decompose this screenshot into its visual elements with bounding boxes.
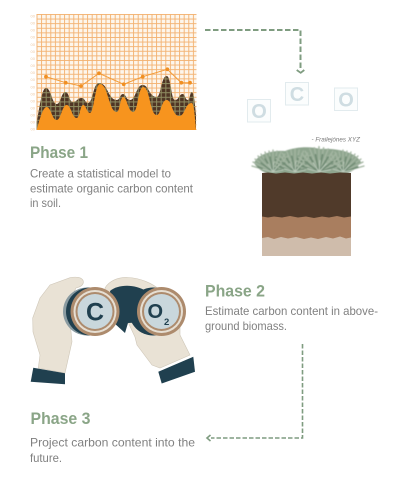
- y axis labels: 00: [30, 91, 36, 96]
- y axis labels: 00: [30, 56, 36, 61]
- icon: O letter box right: [334, 88, 358, 112]
- binocular body: [110, 286, 146, 333]
- dark area series: [37, 76, 196, 130]
- text: phase 1 description: [30, 168, 194, 210]
- label O2: O: [148, 301, 163, 323]
- icon: O letter box right: O: [338, 90, 354, 112]
- line series with markers: [44, 67, 192, 88]
- text: phase 3 description: [30, 436, 195, 465]
- text: phase 2 description: ground biomass.: [205, 320, 287, 333]
- y axis labels: 00: [30, 112, 36, 118]
- text: phase 1 description: in soil.: [30, 197, 61, 210]
- y axis labels: 00: [30, 120, 36, 124]
- chart grid: [36, 14, 196, 130]
- right cuff: [158, 357, 195, 384]
- icon: C letter box: C: [290, 84, 304, 106]
- text: phase 3 description: future.: [30, 452, 62, 465]
- text: phase 1 description: Create a statistical model to: [30, 168, 171, 180]
- soil layer: medium: [262, 213, 351, 239]
- icon: C letter box: [286, 82, 308, 106]
- soil layer: light: [262, 232, 351, 256]
- left cuff: [31, 368, 65, 384]
- y axis labels: 00: [30, 49, 36, 54]
- y axis labels: 00: [30, 42, 36, 47]
- arrow: phase 2 to phase 3: [207, 344, 302, 441]
- left hand: [33, 277, 83, 373]
- y axis labels: 00: [30, 20, 36, 26]
- label O2: [148, 301, 169, 328]
- plant tufts: [252, 147, 364, 174]
- illustration: hands holding binoculars: [31, 277, 195, 384]
- right barrel: [129, 287, 186, 336]
- y axis labels: 00: [30, 14, 36, 18]
- y axis labels: 00: [30, 106, 36, 110]
- y axis labels: [30, 14, 36, 132]
- y axis labels: 00: [30, 77, 36, 82]
- heading: phase 3: Phase 3: [30, 409, 90, 428]
- y axis labels: 00: [30, 70, 36, 75]
- label O2: 2: [164, 317, 169, 328]
- heading: phase 1: Phase 1: [30, 143, 88, 162]
- icon: O letter box left: [248, 100, 270, 123]
- text: phase 2 description: [205, 305, 378, 333]
- y axis labels: 00: [30, 126, 36, 132]
- letter C: C: [86, 298, 104, 326]
- chart: statistical model: [30, 14, 196, 132]
- y axis labels: 00: [30, 98, 36, 104]
- heading: phase 2: Phase 2: [205, 282, 265, 301]
- plant label: - Frailejónes XYZ: [312, 136, 361, 144]
- illustration: soil profile with frailejones: [252, 147, 364, 256]
- left barrel: [63, 287, 120, 336]
- y axis labels: 00: [30, 63, 36, 68]
- soil layer: dark: [262, 172, 351, 218]
- orange area series: [37, 84, 196, 130]
- arrow: chart to carbon atoms: [205, 30, 304, 73]
- text: phase 1 description: estimate organic carbon content: [30, 182, 194, 195]
- text: phase 3 description: Project carbon content into the: [30, 436, 195, 450]
- text: phase 2 description: Estimate carbon content in above-: [205, 305, 378, 318]
- icon: O letter box left: O: [251, 101, 267, 123]
- right hand: [105, 277, 190, 368]
- y axis labels: 00: [30, 28, 36, 32]
- y axis labels: 00: [30, 84, 36, 89]
- y axis labels: 00: [30, 35, 36, 40]
